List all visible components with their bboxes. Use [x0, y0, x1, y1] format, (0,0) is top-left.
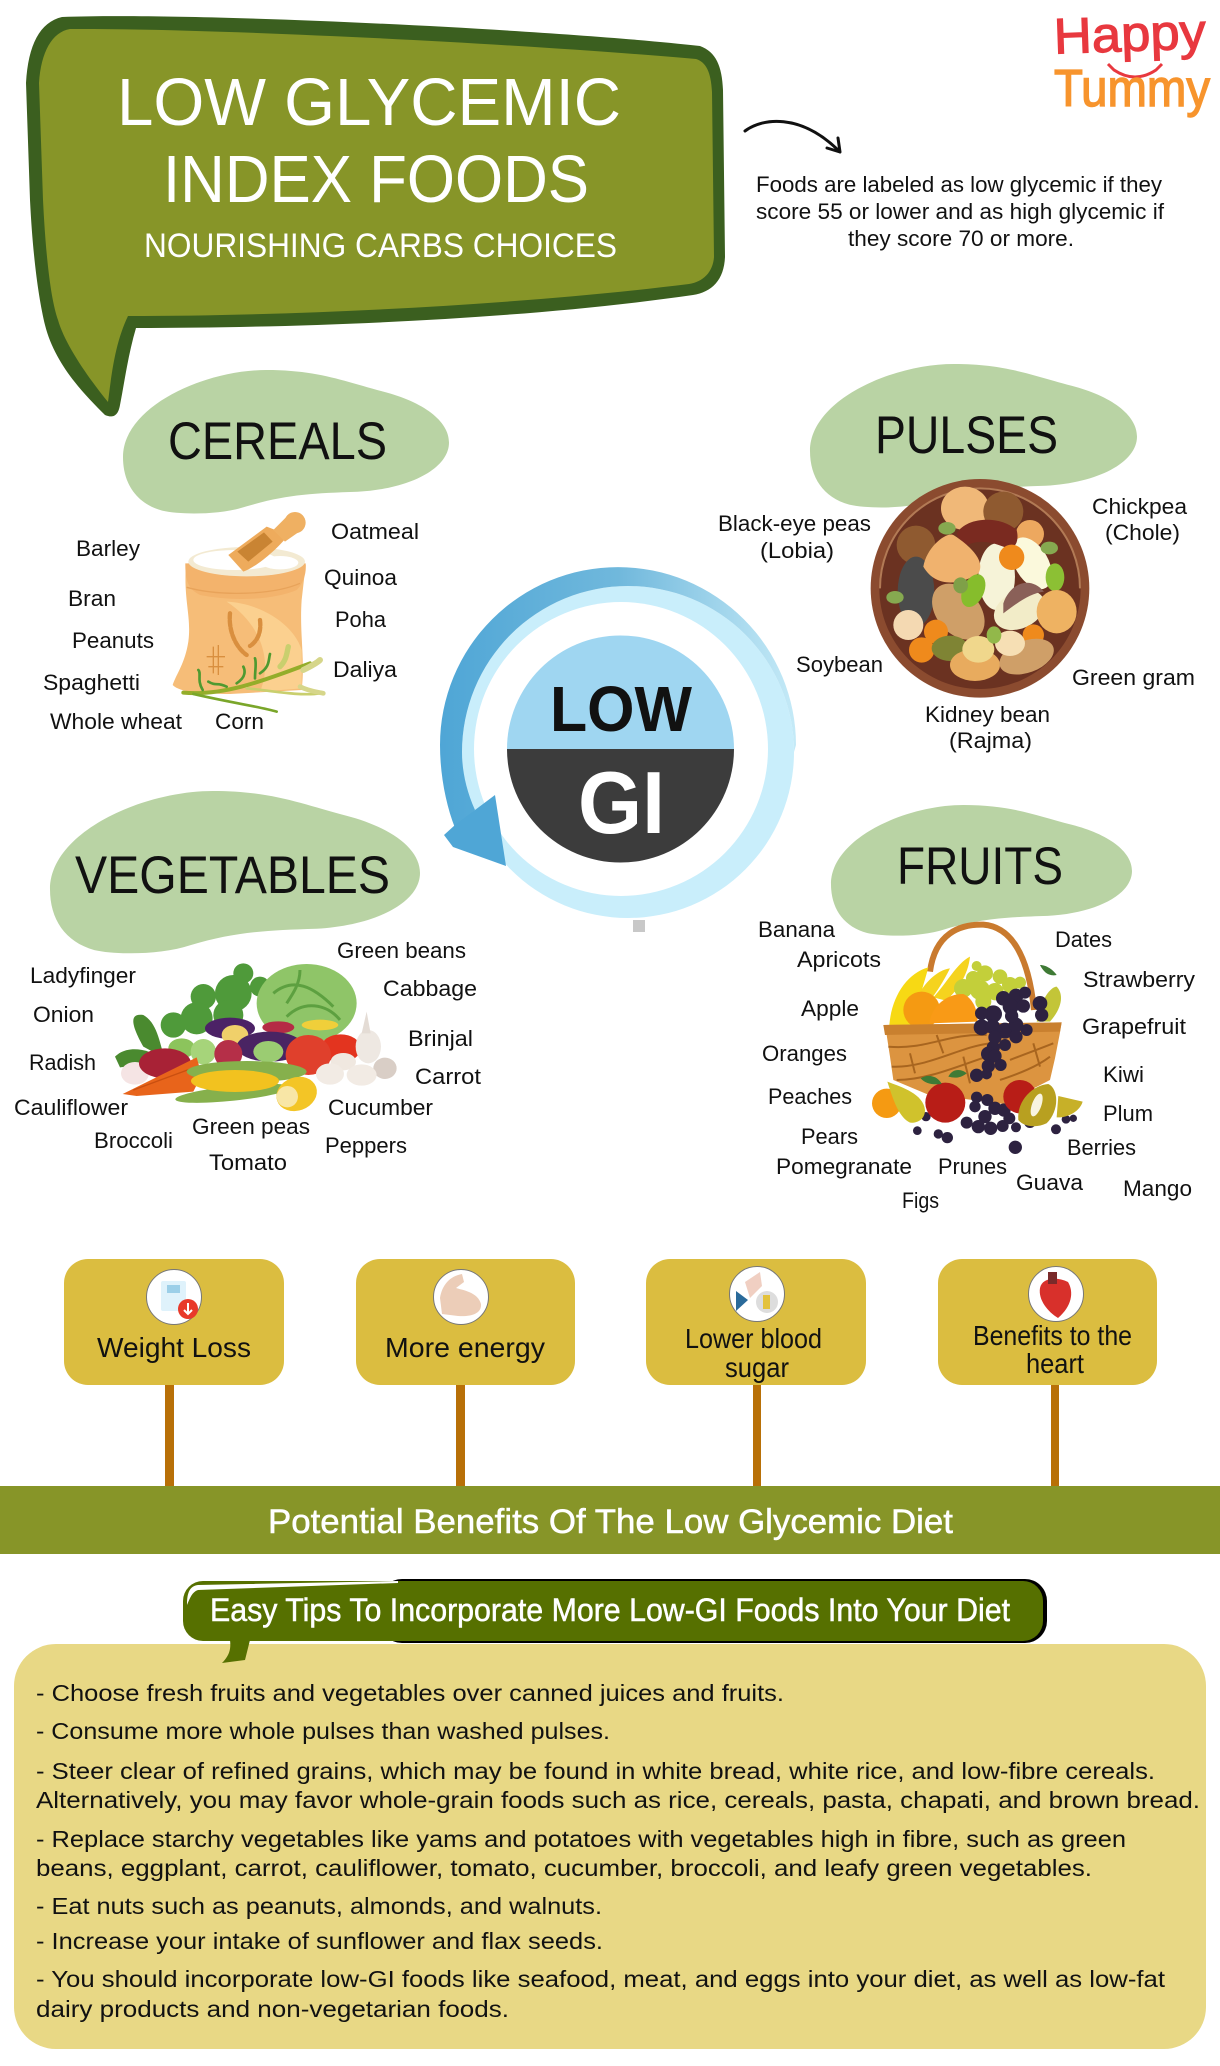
vegetables labels: Ladyfinger [30, 963, 136, 988]
icon: grain sack [173, 512, 323, 712]
vegetables heading: VEGETABLES [75, 846, 390, 905]
tips list: - Replace starchy vegetables like yams and potatoes with vegetables high in fibre, such as green [36, 1826, 1126, 1852]
definition text block [756, 172, 1165, 251]
cereals blob [123, 370, 449, 514]
tips list: - Eat nuts such as peanuts, almonds, and walnuts. [36, 1893, 602, 1919]
vegetables labels: Carrot [415, 1064, 481, 1089]
pulses heading: PULSES [875, 406, 1058, 465]
panel: vegetables [14, 791, 481, 1175]
pulses labels [718, 494, 1195, 753]
fruits labels: Dates [1055, 927, 1112, 952]
fruits labels: Peaches [768, 1084, 852, 1109]
fruits blob [831, 805, 1132, 936]
benefit sign: weight loss [64, 1259, 284, 1486]
pulses labels: Kidney bean [925, 702, 1050, 727]
tips list: - Increase your intake of sunflower and flax seeds. [36, 1928, 603, 1954]
pulses labels: Chickpea [1092, 494, 1188, 519]
vegetables labels [14, 938, 481, 1175]
icon: Low GI circular badge [440, 567, 796, 932]
tips heading ribbon [183, 1579, 1047, 1663]
icon: heart [1028, 1266, 1084, 1322]
fruits heading: FRUITS [897, 837, 1063, 896]
tips list [36, 1680, 1200, 2022]
vegetables labels: Brinjal [408, 1026, 473, 1051]
subtitle: NOURISHING CARBS CHOICES [144, 227, 617, 265]
vegetables labels: Cabbage [383, 976, 477, 1001]
pulses labels: Green gram [1072, 665, 1195, 690]
tips list: Alternatively, you may favor whole-grain foods such as rice, cereals, pasta, chapati, and brown bread. [36, 1787, 1200, 1813]
icon: Low GI circular badge: GI [578, 753, 665, 852]
cereals labels: Whole wheat [50, 709, 182, 734]
benefit sign: lower blood sugar [646, 1259, 866, 1486]
tips list: beans, eggplant, carrot, cauliflower, tomato, cucumber, broccoli, and leafy green vegetables. [36, 1855, 1092, 1881]
cereals labels: Peanuts [72, 628, 154, 653]
fruits labels: Banana [758, 917, 836, 942]
tips panel [14, 1644, 1206, 2049]
vegetables labels: Tomato [209, 1150, 287, 1175]
pulses labels: Black-eye peas [718, 511, 871, 536]
fruits labels: Kiwi [1103, 1062, 1144, 1087]
benefits banner [0, 1486, 1220, 1554]
benefit sign: lower blood sugar: Lower blood [685, 1323, 822, 1354]
panel: cereals [43, 370, 449, 734]
cereals labels: Oatmeal [331, 519, 419, 544]
pulses labels: (Chole) [1105, 520, 1180, 545]
vegetables labels: Green beans [337, 938, 466, 963]
fruits labels: Grapefruit [1082, 1014, 1186, 1039]
vegetables blob [50, 791, 420, 953]
tips list: - Consume more whole pulses than washed pulses. [36, 1718, 610, 1744]
benefit sign: more energy: More energy [385, 1332, 545, 1363]
benefits banner: Potential Benefits Of The Low Glycemic Diet [268, 1503, 954, 1541]
vegetables labels: Green peas [192, 1114, 310, 1139]
logo: Happy Tummy: Happy [1053, 3, 1207, 65]
benefit sign: lower blood sugar: sugar [725, 1352, 789, 1383]
vegetables labels: Radish [29, 1050, 96, 1075]
cereals labels: Spaghetti [43, 670, 140, 695]
panel: fruits [758, 805, 1195, 1213]
cereals labels [43, 519, 419, 734]
definition text block: they score 70 or more. [848, 226, 1074, 251]
fruits labels: Berries [1067, 1135, 1136, 1160]
fruits labels: Plum [1103, 1101, 1153, 1126]
title line 1: LOW GLYCEMIC [117, 65, 621, 140]
tips list: - Choose fresh fruits and vegetables over canned juices and fruits. [36, 1680, 784, 1706]
fruits labels: Prunes [938, 1154, 1007, 1179]
fruits labels: Pears [801, 1124, 858, 1149]
vegetables labels: Broccoli [94, 1128, 173, 1153]
cereals labels: Quinoa [324, 565, 398, 590]
pulses blob [810, 364, 1137, 508]
cereals labels: Daliya [333, 657, 398, 682]
icon: Low GI circular badge: LOW [550, 673, 693, 745]
vegetables labels: Onion [33, 1002, 94, 1027]
logo: Happy Tummy [1053, 3, 1210, 118]
icon: flexed arm [434, 1270, 488, 1324]
title line 2: INDEX FOODS [163, 142, 589, 217]
fruits labels: Oranges [762, 1041, 847, 1066]
cereals labels: Barley [76, 536, 140, 561]
definition text block: Foods are labeled as low glycemic if they [756, 172, 1162, 197]
icon: glucose test [730, 1266, 784, 1322]
fruits labels: Pomegranate [776, 1154, 912, 1179]
arrow to definition [745, 121, 840, 152]
pulses labels: (Lobia) [760, 538, 834, 563]
benefit sign: more energy [356, 1259, 575, 1486]
fruits labels: Apricots [797, 947, 881, 972]
fruits labels: Apple [801, 996, 859, 1021]
vegetables labels: Peppers [325, 1133, 407, 1158]
fruits labels [758, 917, 1195, 1213]
icon: vegetable pile [115, 963, 397, 1117]
pulses labels: Soybean [796, 652, 883, 677]
tips heading ribbon: Easy Tips To Incorporate More Low-GI Foods Into Your Diet [210, 1592, 1010, 1628]
benefit sign: heart: Benefits to the [973, 1320, 1132, 1351]
panel: pulses [718, 364, 1195, 753]
icon: bowl of pulses [871, 479, 1089, 698]
cereals labels: Bran [68, 586, 116, 611]
tips list: - You should incorporate low-GI foods like seafood, meat, and eggs into your diet, as well as low-fat [36, 1966, 1165, 1992]
benefit sign: heart [938, 1259, 1157, 1486]
icon: fruit basket [872, 925, 1083, 1154]
pulses labels: (Rajma) [949, 728, 1032, 753]
icon: weighing scale [146, 1270, 202, 1324]
tips list: dairy products and non-vegetarian foods. [36, 1996, 509, 2022]
benefit sign: weight loss: Weight Loss [97, 1332, 251, 1363]
fruits labels: Strawberry [1083, 967, 1195, 992]
fruits labels: Mango [1123, 1176, 1192, 1201]
fruits labels: Figs [902, 1188, 939, 1213]
cereals labels: Corn [215, 709, 264, 734]
definition text block: score 55 or lower and as high glycemic if [756, 199, 1165, 224]
cereals heading: CEREALS [168, 412, 387, 471]
vegetables labels: Cucumber [328, 1095, 433, 1120]
cereals labels: Poha [335, 607, 387, 632]
benefit sign: heart: heart [1026, 1348, 1084, 1379]
tips list: - Steer clear of refined grains, which may be found in white bread, white rice, and low-fibre cereals. [36, 1758, 1155, 1784]
title speech bubble [26, 16, 725, 416]
vegetables labels: Cauliflower [14, 1095, 128, 1120]
fruits labels: Guava [1016, 1170, 1084, 1195]
